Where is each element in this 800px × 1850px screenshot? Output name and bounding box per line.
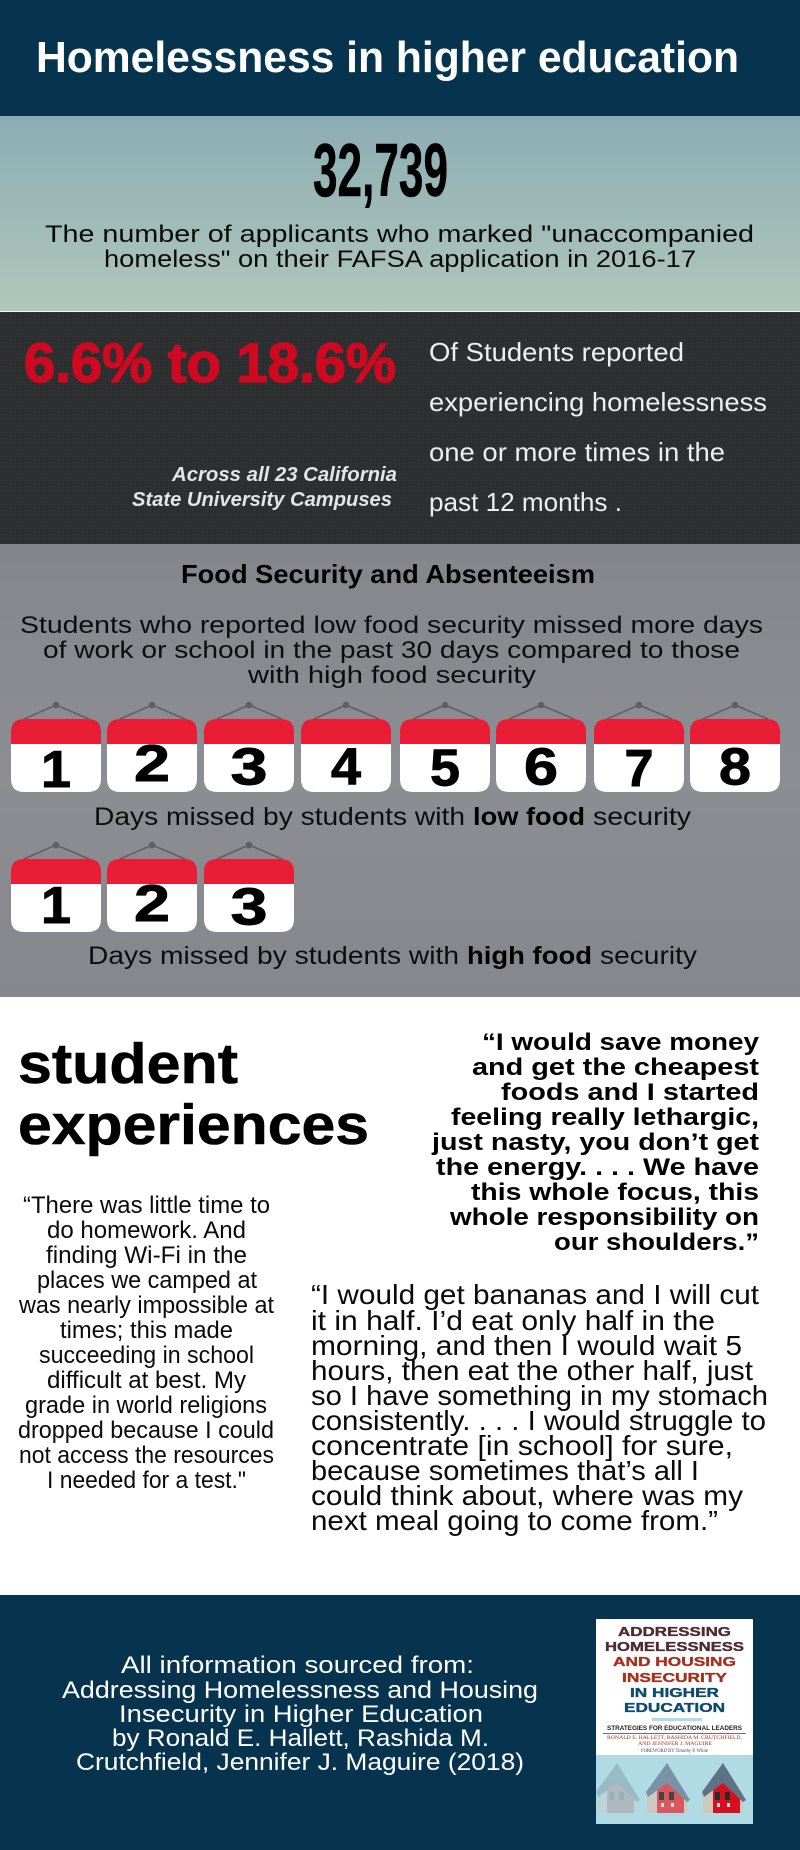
quote: homework and Wi-Fi: do homework. And xyxy=(47,1217,246,1244)
campus note: Across all 23 California xyxy=(171,464,397,486)
quote: bananas: “I would get bananas and I will cut xyxy=(311,1279,759,1310)
statistic description: past 12 months . xyxy=(429,487,622,517)
campus note xyxy=(132,464,397,511)
high food security caption: Days missed by students with xyxy=(88,942,459,970)
book cover xyxy=(596,1619,753,1824)
quote: bananas: concentrate [in school] for sure, xyxy=(311,1430,733,1461)
calendar icons: low food security, 8 days: 5 xyxy=(430,740,460,798)
low food security caption: Days missed by students with xyxy=(94,803,465,831)
quote: saving money: this whole focus, this xyxy=(471,1179,759,1206)
panel: student experiences xyxy=(0,997,800,1595)
section description: Students who reported low food security missed more days xyxy=(20,612,763,639)
calendar icons: low food security, 8 days: 6 xyxy=(524,738,558,796)
statistic description: one or more times in the xyxy=(429,437,725,467)
statistic description: The number of applicants who marked "unaccompanied xyxy=(45,221,754,248)
source text: Crutchfield, Jennifer J. Maguire (2018) xyxy=(76,1749,524,1776)
panel: header xyxy=(0,0,800,116)
quote: bananas: because sometimes that’s all I xyxy=(311,1455,699,1486)
book cover: RONALD E. HALLETT, RASHIDA M. CRUTCHFIELD, xyxy=(607,1736,742,1741)
low food security caption xyxy=(94,803,692,831)
low food security caption: low food xyxy=(473,803,585,831)
quote: saving money: our shoulders.” xyxy=(554,1229,759,1256)
quote: homework and Wi-Fi: not access the resources xyxy=(19,1442,274,1469)
book title: HOMELESSNESS xyxy=(605,1639,744,1654)
book cover: FOREWORD BY Timothy P. White xyxy=(641,1749,709,1754)
calendar icons: low food security, 8 days: 8 xyxy=(719,738,751,796)
book cover: STRATEGIES FOR EDUCATIONAL LEADERS xyxy=(607,1726,742,1732)
icon: faded house xyxy=(596,1763,640,1813)
quote: bananas: so I have something in my stomach xyxy=(311,1380,768,1411)
quote: bananas: hours, then eat the other half, just xyxy=(311,1355,753,1386)
section heading: experiences xyxy=(18,1093,369,1157)
statistic description: homeless" on their FAFSA application in 2016-17 xyxy=(104,246,696,273)
book title: AND HOUSING xyxy=(613,1654,736,1669)
calendar icons: low food security, 8 days: 7 xyxy=(624,740,654,798)
calendar icons: low food security, 8 days xyxy=(11,702,780,799)
panel: California State University statistic xyxy=(0,312,800,544)
source text: Addressing Homelessness and Housing xyxy=(62,1677,538,1704)
calendar icons: high food security, 3 days xyxy=(11,842,294,936)
quote: bananas: consistently. . . . I would struggle to xyxy=(311,1405,766,1436)
quote: saving money: “I would save money xyxy=(482,1029,760,1056)
panel: FAFSA statistic xyxy=(0,116,800,311)
quote: saving money xyxy=(431,1029,760,1256)
section heading: Food Security and Absenteeism xyxy=(181,559,595,589)
calendar icons: high food security, 3 days: 2 xyxy=(134,875,170,933)
quote: homework and Wi-Fi: places we camped at xyxy=(37,1267,257,1294)
calendar icons: high food security, 3 days: 3 xyxy=(230,878,268,936)
source text: All information sourced from: xyxy=(121,1652,474,1679)
high food security caption: high food xyxy=(467,942,592,970)
section description xyxy=(20,612,763,689)
statistic description xyxy=(429,337,767,517)
icon: pale red house xyxy=(646,1763,690,1813)
book title: INSECURITY xyxy=(622,1670,727,1685)
statistic description xyxy=(45,221,754,273)
quote: bananas xyxy=(311,1279,768,1536)
quote: homework and Wi-Fi xyxy=(18,1192,274,1494)
campus note: State University Campuses xyxy=(132,489,392,511)
book title: IN HIGHER xyxy=(630,1685,720,1700)
icon: bright red house xyxy=(702,1763,746,1813)
quote: bananas: next meal going to come from.” xyxy=(311,1505,718,1536)
quote: saving money: and get the cheapest xyxy=(472,1054,759,1081)
calendar icons: low food security, 8 days: 2 xyxy=(134,735,170,793)
statistic description: experiencing homelessness xyxy=(429,387,767,417)
quote: homework and Wi-Fi: I needed for a test." xyxy=(47,1467,246,1494)
quote: homework and Wi-Fi: succeeding in school xyxy=(39,1342,254,1369)
quote: bananas: morning, and then I would wait 5 xyxy=(311,1330,742,1361)
quote: saving money: the energy. . . . We have xyxy=(436,1154,759,1181)
big number: 32,739 xyxy=(313,128,448,212)
source text xyxy=(62,1652,538,1776)
quote: saving money: foods and I started xyxy=(501,1079,759,1106)
quote: bananas: it in half. I’d eat only half in the xyxy=(311,1305,715,1336)
quote: saving money: whole responsibility on xyxy=(449,1204,759,1231)
book title: EDUCATION xyxy=(624,1700,725,1715)
quote: homework and Wi-Fi: times; this made xyxy=(60,1317,233,1344)
section description: of work or school in the past 30 days compared to those xyxy=(43,637,740,664)
section description: with high food security xyxy=(247,662,536,689)
statistic description: Of Students reported xyxy=(429,337,684,367)
quote: bananas: could think about, where was my xyxy=(311,1480,743,1511)
high food security caption xyxy=(88,942,698,970)
source text: by Ronald E. Hallett, Rashida M. xyxy=(112,1725,489,1752)
calendar icons: low food security, 8 days: 1 xyxy=(41,741,71,799)
book title: ADDRESSING xyxy=(618,1624,731,1639)
quote: homework and Wi-Fi: dropped because I could xyxy=(18,1417,274,1444)
high food security caption: security xyxy=(600,942,698,970)
low food security caption: security xyxy=(593,803,692,831)
book title xyxy=(605,1624,744,1715)
quote: saving money: feeling really lethargic, xyxy=(451,1104,759,1131)
source text: Insecurity in Higher Education xyxy=(119,1701,483,1728)
title: Homelessness in higher education xyxy=(36,33,739,82)
section heading: student xyxy=(18,1032,238,1096)
calendar icons: high food security, 3 days: 1 xyxy=(41,877,71,935)
quote: homework and Wi-Fi: difficult at best. My xyxy=(47,1367,246,1394)
quote: homework and Wi-Fi: grade in world religions xyxy=(25,1392,267,1419)
quote: homework and Wi-Fi: “There was little time to xyxy=(23,1192,270,1219)
panel: footer source xyxy=(0,1595,800,1850)
percentage range: 6.6% to 18.6% xyxy=(24,331,396,394)
quote: homework and Wi-Fi: finding Wi-Fi in the xyxy=(46,1242,247,1269)
calendar icons: low food security, 8 days: 3 xyxy=(230,738,268,796)
quote: homework and Wi-Fi: was nearly impossible at xyxy=(18,1292,274,1319)
quote: saving money: just nasty, you don’t get xyxy=(431,1129,759,1156)
section heading xyxy=(18,1032,369,1157)
calendar icons: low food security, 8 days: 4 xyxy=(331,738,361,796)
book cover: AND JENNIFER J. MAGUIRE xyxy=(638,1742,712,1747)
panel: food security and absenteeism xyxy=(0,544,800,997)
